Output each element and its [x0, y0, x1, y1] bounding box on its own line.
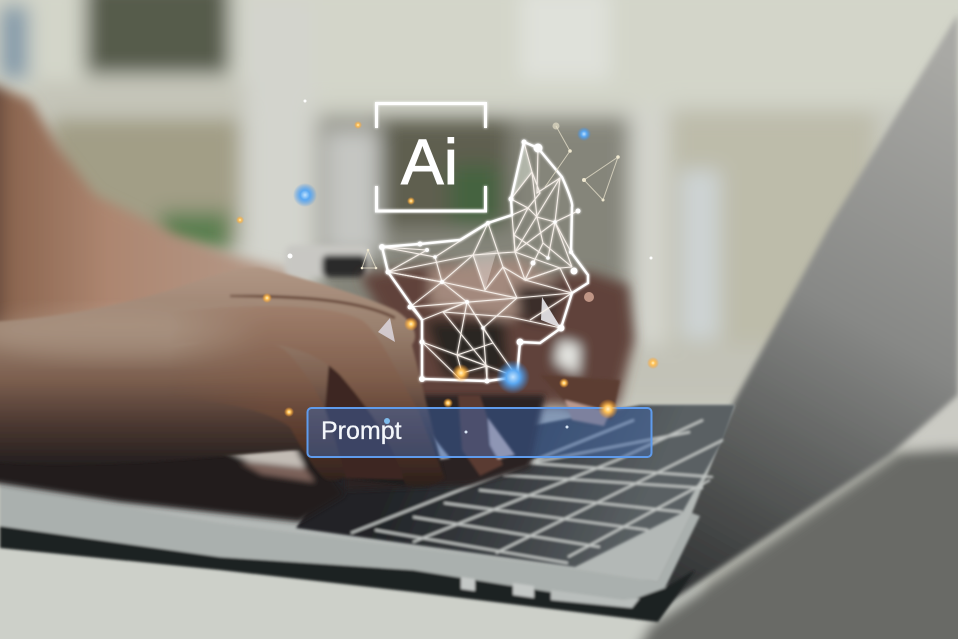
index finger — [170, 306, 445, 486]
soft highlights on the dark keys near the hands — [428, 433, 450, 460]
glowing particles — [236, 100, 659, 434]
fingers and gaps — [193, 294, 446, 486]
floating triangles — [361, 122, 620, 269]
forearm — [0, 78, 300, 335]
gap between the fingers — [324, 366, 404, 480]
head outline — [382, 142, 588, 381]
laptop lid — [640, 14, 958, 615]
laptop base — [0, 405, 735, 622]
middle finger — [198, 341, 344, 480]
keyboard — [296, 405, 735, 567]
wrist highlight — [0, 311, 260, 359]
inner mesh lines — [382, 142, 578, 381]
left hand — [0, 268, 445, 486]
AI bracket frame — [376, 104, 486, 211]
dark area under the hands — [0, 395, 545, 522]
top finger crease — [230, 296, 395, 318]
translucent facets — [378, 142, 561, 342]
prompt input box — [308, 408, 652, 457]
Ai label: Ai — [401, 126, 458, 198]
fingers of the right hand — [458, 375, 620, 476]
right hand behind wireframe — [360, 258, 634, 440]
watch and wrist behind — [285, 245, 370, 277]
blurred desk surface — [0, 370, 958, 639]
mesh nodes — [379, 140, 580, 384]
prompt label: Prompt — [321, 417, 402, 445]
wireframe head — [378, 140, 588, 384]
